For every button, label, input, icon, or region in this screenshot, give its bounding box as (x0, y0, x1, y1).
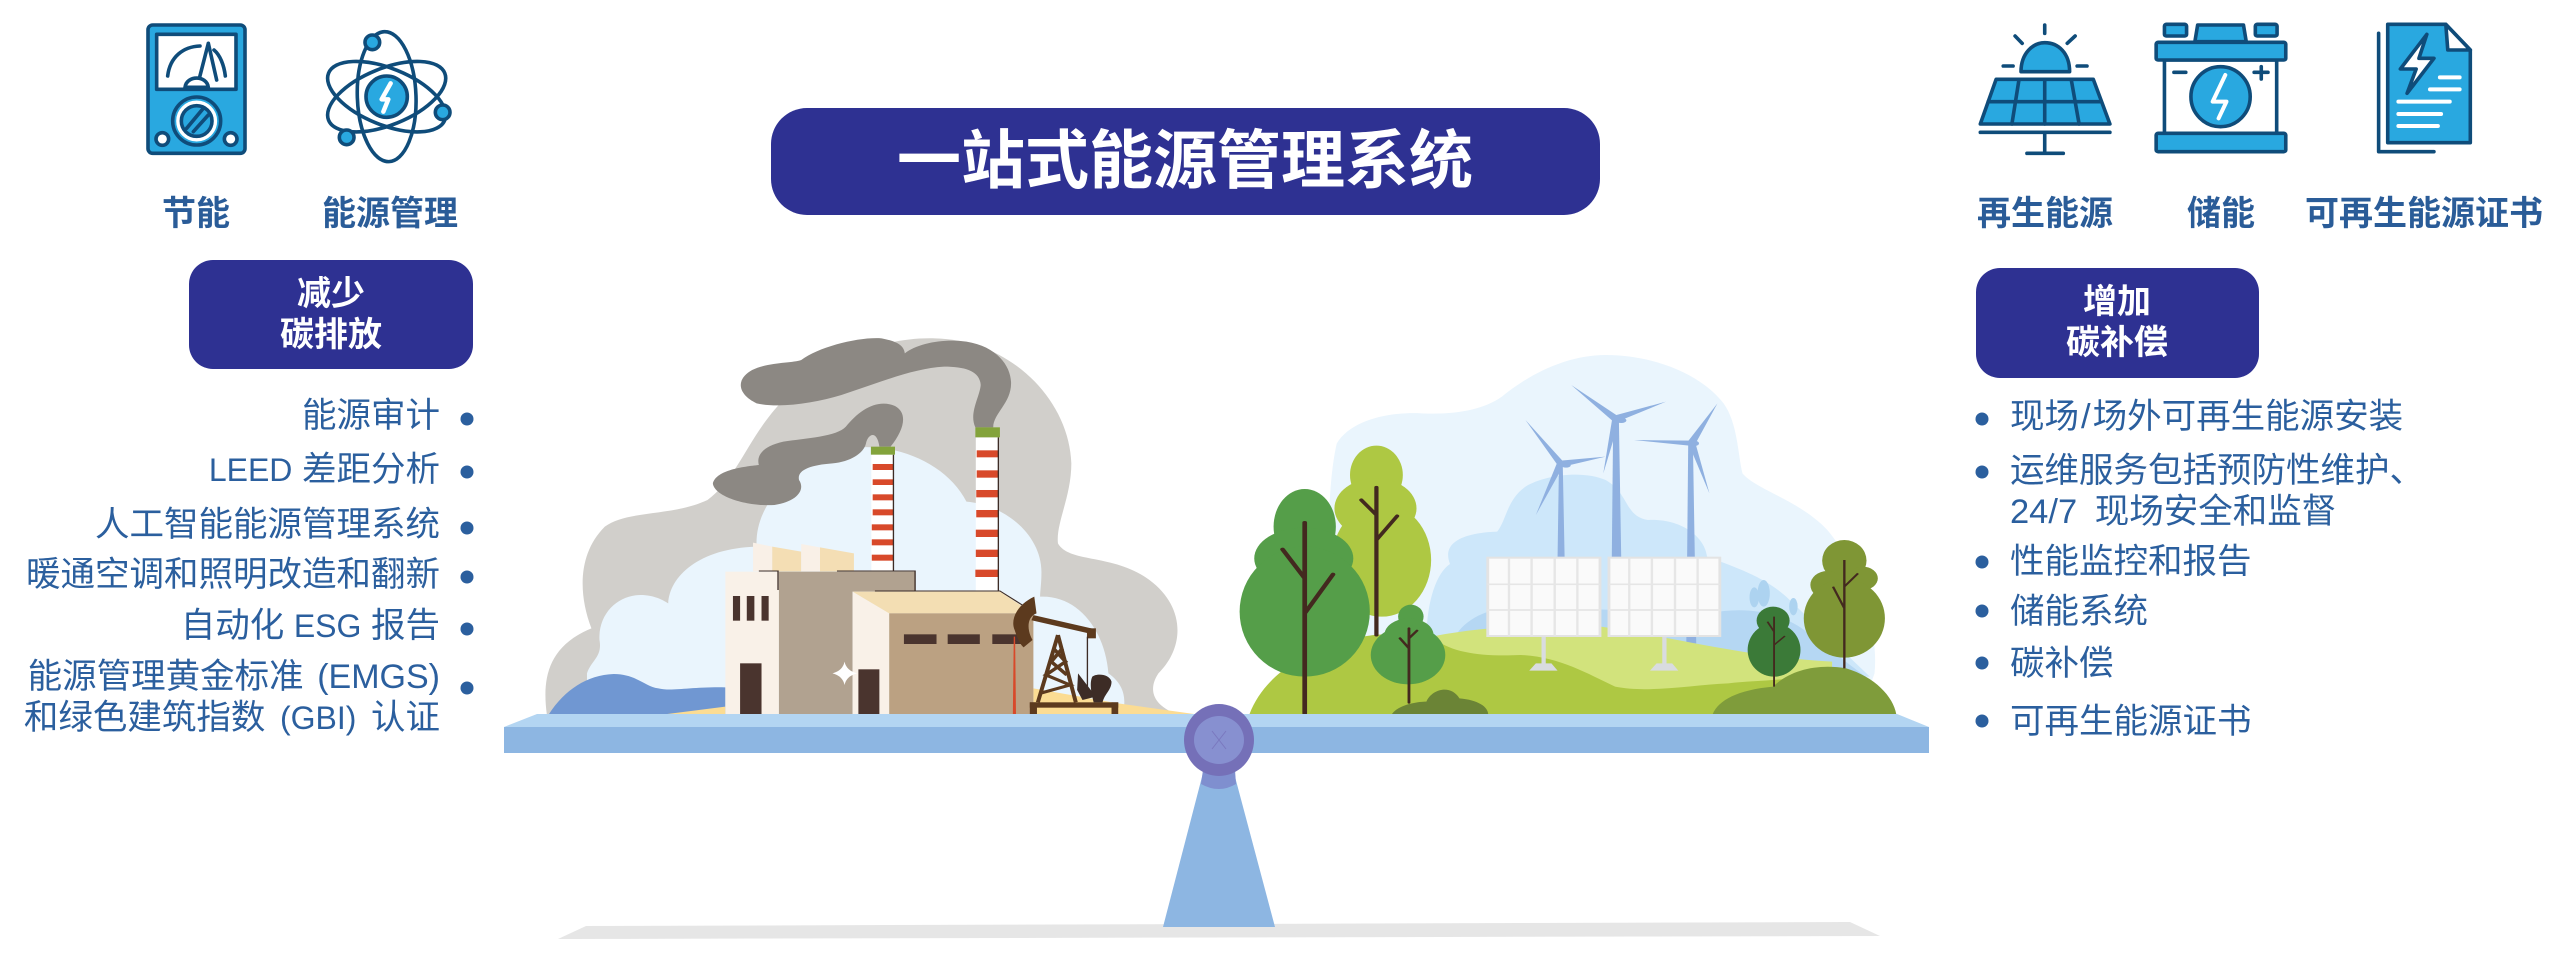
balance scale (504, 704, 1929, 927)
pill: increase carbon offsets: 增加 (2083, 283, 2151, 321)
list: increase carbon offsets: 可再生能源证书 (2010, 703, 2252, 741)
green hills (1250, 625, 1896, 714)
pill: increase carbon offsets: 碳补偿 (2066, 324, 2168, 362)
title pill: 一站式能源管理系统 (897, 125, 1473, 197)
list: increase carbon offsets: 运维服务包括预防性维护、 (2010, 452, 2424, 490)
icon: certificate document (2379, 24, 2470, 152)
list: increase carbon offsets: 储能系统 (2010, 593, 2148, 631)
icon: battery (2156, 24, 2286, 152)
label: renewable energy: 再生能源 (1977, 195, 2113, 233)
tall chimney (975, 427, 1000, 591)
list: reduce carbon emissions: 能源审计 (302, 397, 440, 435)
list: reduce carbon emissions: 自动化 ESG 报告 (181, 607, 440, 645)
label: renewable energy certificates: 可再生能源证书 (2305, 195, 2543, 233)
short chimney (871, 447, 895, 571)
list: reduce carbon emissions: LEED 差距分析 (209, 451, 440, 489)
label: energy storage: 储能 (2187, 195, 2255, 233)
solar panels (1488, 558, 1720, 671)
label: energy saving: 节能 (162, 195, 230, 233)
list: increase carbon offsets: 碳补偿 (2010, 645, 2114, 683)
smoke plume: tall chimney (741, 338, 1011, 427)
illustration: factory with smoke (545, 338, 1194, 714)
scale beam (504, 714, 1929, 753)
scale pivot (1184, 704, 1254, 776)
pill: reduce carbon emissions (189, 260, 473, 369)
smoke plume: short chimney (713, 404, 903, 505)
olive tree (1804, 540, 1885, 668)
list: increase carbon offsets: 24/7 现场安全和监督 (2010, 493, 2336, 531)
illustration: green energy landscape (1240, 355, 1896, 714)
pill: reduce carbon emissions: 减少 (297, 275, 365, 313)
icon: energy atom (318, 31, 455, 163)
yellow-green tree (1332, 446, 1431, 635)
wind turbines (1525, 385, 1717, 643)
factory buildings (725, 543, 1033, 714)
large green tree (1240, 489, 1370, 713)
oil pumpjack (1013, 597, 1118, 714)
list: reduce carbon emissions: 和绿色建筑指数 (GBI) 认证 (24, 699, 440, 737)
icon: solar panel (1980, 25, 2110, 153)
pill: increase carbon offsets (1976, 268, 2259, 378)
list: increase carbon offsets (1976, 398, 2424, 741)
list: reduce carbon emissions: 暖通空调和照明改造和翻新 (26, 556, 440, 594)
scale stand (1163, 770, 1275, 927)
title pill (771, 108, 1600, 215)
list: reduce carbon emissions (24, 397, 474, 737)
small background trees (1750, 580, 1798, 615)
dark green tree (1748, 607, 1800, 687)
list: reduce carbon emissions: 人工智能能源管理系统 (95, 506, 440, 544)
list: reduce carbon emissions: 能源管理黄金标准 (EMGS) (28, 658, 440, 696)
list: increase carbon offsets: 性能监控和报告 (2010, 543, 2252, 581)
pill: reduce carbon emissions: 碳排放 (280, 316, 382, 354)
ground shadow (558, 922, 1880, 939)
list: increase carbon offsets: 现场/场外可再生能源安装 (2010, 398, 2403, 436)
label: energy management: 能源管理 (322, 195, 458, 233)
small green tree (1371, 605, 1445, 703)
icon: voltmeter (148, 25, 245, 153)
